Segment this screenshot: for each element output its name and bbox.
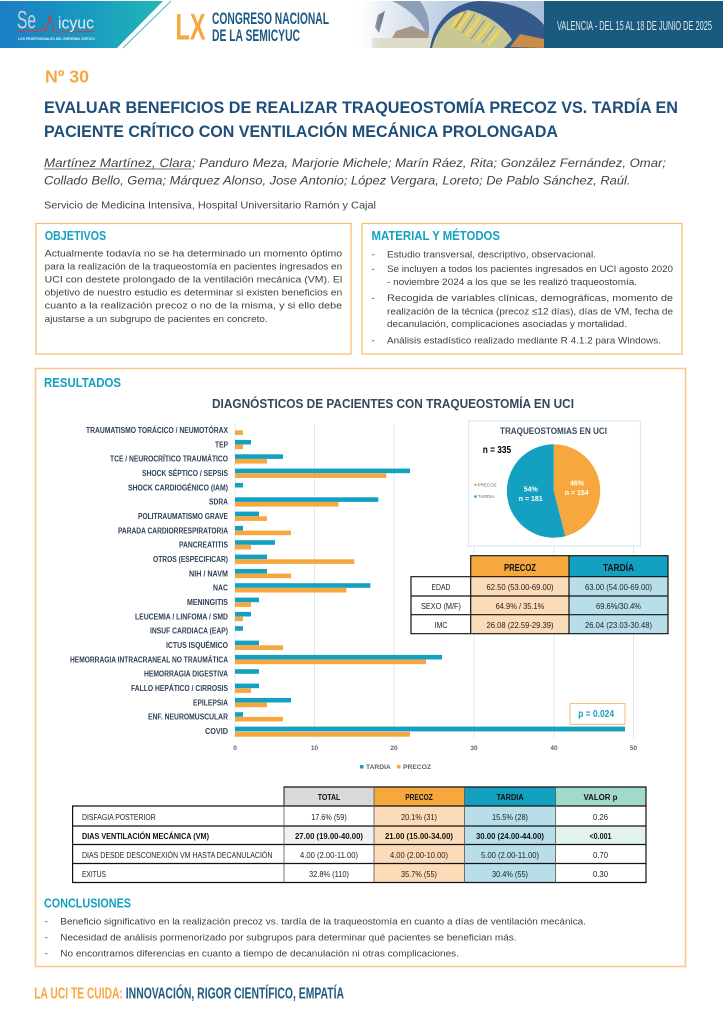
- table: resultados por grupo: DISFAGIA POSTERIOR: [82, 813, 156, 822]
- precoz bars: [235, 430, 426, 737]
- tardía bars: [235, 440, 625, 731]
- heading: objetivos: OBJETIVOS: [45, 229, 106, 243]
- list: material y métodos: - noviembre 2024 a los que se les realizó traqueostomía.: [387, 277, 637, 288]
- list: material y métodos: -: [372, 293, 375, 304]
- table: resultados por grupo: 35.7% (55): [401, 870, 437, 879]
- callout: p value: p = 0.024: [578, 709, 614, 720]
- congress title: DE LA SEMICYUC: [212, 27, 300, 45]
- chart title: DIAGNÓSTICOS DE PACIENTES CON TRAQUEOSTOMÍA EN UCI: [212, 396, 574, 411]
- panel: resultados: [36, 368, 686, 966]
- pie chart: traqueostomías en UCI: n = 154: [565, 490, 589, 497]
- pie chart: traqueostomías en UCI: [468, 421, 640, 546]
- heading: material y métodos: MATERIAL Y MÉTODOS: [372, 228, 500, 243]
- text: objetivos: [45, 248, 342, 325]
- table: resultados por grupo: 0.26: [593, 813, 609, 822]
- x axis labels: [233, 745, 637, 752]
- panel: objetivos: [36, 224, 351, 354]
- category labels: HEMORRAGIA DIGESTIVA: [144, 670, 228, 679]
- table: resultados por grupo: 17.6% (59): [311, 813, 347, 822]
- category labels: TEP: [215, 440, 229, 449]
- footer slogan: [34, 985, 344, 1003]
- table: características basales: 63.00 (54.00-69.00): [585, 583, 652, 592]
- category labels: NAC: [213, 584, 228, 593]
- bar chart: diagnósticos: [70, 424, 637, 771]
- category labels: PARADA CARDIORRESPIRATORIA: [118, 526, 228, 535]
- table: resultados por grupo: 0.70: [593, 851, 609, 860]
- category labels: COVID: [205, 727, 228, 736]
- table: características basales: [411, 556, 668, 634]
- footer slogan: LA UCI TE CUIDA:: [34, 986, 123, 1003]
- category labels: FALLO HEPÁTICO / CIRROSIS: [131, 684, 229, 693]
- congress title: LX: [176, 6, 206, 48]
- table: resultados por grupo: PRECOZ: [405, 793, 433, 802]
- table: características basales: 69.6%/30.4%: [596, 602, 641, 611]
- category labels: OTROS (ESPECIFICAR): [153, 555, 228, 564]
- pie legend: PRECOZ: [478, 482, 497, 487]
- table: resultados por grupo: 4.00 (2.00-10.00): [390, 851, 448, 860]
- pie chart: traqueostomías en UCI: n = 335: [483, 445, 512, 456]
- x axis labels: 30: [470, 745, 478, 752]
- callout: p value: [570, 704, 625, 724]
- table: resultados por grupo: 30.00 (24.00-44.00): [476, 832, 544, 841]
- title: EVALUAR BENEFICIOS DE REALIZAR TRAQUEOSTOMÍA PRECOZ VS. TARDÍA EN: [44, 98, 678, 117]
- category labels: SHOCK SÉPTICO / SEPSIS: [142, 469, 229, 478]
- pie chart: traqueostomías en UCI: 46%: [570, 480, 585, 488]
- list: conclusiones: -: [45, 917, 48, 928]
- table: características basales: 26.08 (22.59-29.39): [486, 621, 554, 630]
- x axis labels: 20: [390, 745, 398, 752]
- pie chart: traqueostomías en UCI: n = 181: [519, 496, 543, 503]
- footer slogan: INNOVACIÓN, RIGOR CIENTÍFICO, EMPATÍA: [126, 985, 344, 1003]
- x axis labels: 40: [550, 745, 558, 752]
- heading: resultados: RESULTADOS: [44, 376, 121, 390]
- list: material y métodos: -: [372, 335, 375, 346]
- category labels: MENINGITIS: [187, 598, 229, 607]
- table: resultados por grupo: 32.8% (110): [309, 870, 349, 879]
- category labels: SDRA: [209, 498, 228, 507]
- text: objetivos: Actualmente todavía no se ha determinado un momento óptimo: [45, 248, 342, 260]
- chart legend: TARDIA: [366, 764, 391, 771]
- date panel: [544, 1, 723, 48]
- text: objetivos: UCI con destete prolongado de la ventilación mecánica (VM). El: [45, 274, 342, 286]
- list: material y métodos: Análisis estadístico realizado mediante R 4.1.2 para Windows.: [387, 335, 661, 346]
- table: resultados por grupo: DIAS VENTILACIÓN MECÁNICA (VM): [82, 832, 209, 841]
- list: conclusiones: No encontramos diferencias en cuanto a tiempo de decanulación ni otras complicaciones.: [60, 949, 459, 960]
- pie slice: tardía: [507, 444, 565, 538]
- table: características basales: 62.50 (53.00-69.00): [486, 583, 554, 592]
- list: material y métodos: decanulación, complicaciones asociadas y mortalidad.: [387, 319, 627, 330]
- chart legend: PRECOZ: [403, 764, 431, 771]
- text: objetivos: objetivo de nuestro estudio es determinar si existen beneficios en: [45, 288, 342, 298]
- authors: ; Panduro Meza, Marjorie Michele; Marín Ráez, Rita; González Fernández, Omar;: [192, 156, 666, 170]
- category labels: NIH / NAVM: [189, 569, 228, 578]
- table: resultados por grupo: 30.4% (55): [492, 870, 528, 879]
- pie slice: precoz: [554, 444, 600, 536]
- x axis labels: 0: [233, 745, 237, 752]
- category labels: HEMORRAGIA INTRACRANEAL NO TRAUMÁTICA: [70, 655, 228, 664]
- list: material y métodos: Se incluyen a todos los pacientes ingresados en UCI agosto 2020: [387, 264, 673, 275]
- category labels: EPILEPSIA: [193, 698, 228, 707]
- table: características basales: TARDÍA: [603, 561, 634, 574]
- category labels: LEUCEMIA / LINFOMA / SMD: [135, 612, 228, 621]
- category labels: [70, 426, 229, 736]
- table: resultados por grupo: 4.00 (2.00-11.00): [300, 851, 358, 860]
- list: conclusiones: Beneficio significativo en la realización precoz vs. tardía de la traqueostomía en cuanto a días de ventilación mecánica.: [60, 917, 586, 928]
- abstract number: Nº 30: [45, 67, 89, 87]
- pie legend: [474, 482, 497, 499]
- pie chart: traqueostomías en UCI: 54%: [524, 486, 538, 494]
- text: objetivos: para la realización de la traqueostomía en pacientes ingresados en: [45, 262, 342, 272]
- table: resultados por grupo: VALOR p: [584, 793, 618, 802]
- table: resultados por grupo: <0.001: [590, 832, 612, 841]
- table: resultados por grupo: 15.5% (28): [492, 813, 528, 822]
- title: [44, 98, 678, 141]
- table: resultados por grupo: [73, 787, 646, 882]
- table: resultados por grupo: 27.00 (19.00-40.00): [295, 832, 363, 841]
- authors: Martínez Martínez, Clara: [44, 156, 192, 170]
- text: objetivos: cuanto a la realización precoz o no de la misma, y si ello debe: [45, 300, 342, 312]
- list: conclusiones: -: [45, 949, 48, 960]
- list: conclusiones: [45, 917, 586, 960]
- x axis labels: 50: [630, 745, 637, 752]
- category labels: PANCREATITIS: [179, 541, 229, 550]
- list: conclusiones: -: [45, 933, 48, 944]
- category labels: TCE / NEUROCRÍTICO TRAUMÁTICO: [110, 455, 228, 464]
- authors: [44, 156, 666, 188]
- category labels: ICTUS ISQUÉMICO: [166, 641, 228, 650]
- logo panel: Se: [17, 6, 36, 34]
- table: características basales: 64.9% / 35.1%: [496, 602, 544, 611]
- panel: material y métodos: [362, 224, 682, 354]
- category labels: ENF. NEUROMUSCULAR: [148, 713, 228, 722]
- pie chart: traqueostomías en UCI: TRAQUEOSTOMIAS EN UCI: [500, 426, 607, 436]
- chart legend: [360, 764, 431, 771]
- table: características basales: IMC: [434, 621, 448, 630]
- header photo: Valencia architecture: [352, 1, 544, 48]
- logo panel: LOS PROFESIONALES DEL ENFERMO CRÍTICO: [18, 36, 95, 41]
- category labels: TRAUMATISMO TORÁCICO / NEUMOTÓRAX: [86, 426, 229, 435]
- list: material y métodos: [372, 249, 673, 346]
- table: resultados por grupo: 5.00 (2.00-11.00): [481, 851, 539, 860]
- pie legend: TARDIA: [478, 494, 495, 499]
- title: PACIENTE CRÍTICO CON VENTILACIÓN MECÁNICA PROLONGADA: [44, 122, 558, 141]
- table: resultados por grupo: 20.1% (31): [401, 813, 437, 822]
- congress title: [176, 6, 329, 48]
- logo panel: [0, 1, 171, 48]
- table: resultados por grupo: DIAS DESDE DESCONEXIÓN VM HASTA DECANULACIÓN: [82, 851, 273, 860]
- table: características basales: 26.04 (23.03-30.48): [585, 621, 652, 630]
- list: material y métodos: Recogida de variables clínicas, demográficas, momento de: [387, 293, 673, 304]
- table: resultados por grupo: 0.30: [593, 870, 609, 879]
- text: objetivos: ajustarse a un subgrupo de pacientes en concreto.: [45, 314, 268, 325]
- category labels: POLITRAUMATISMO GRAVE: [138, 512, 229, 521]
- table: características basales: EDAD: [432, 583, 451, 592]
- list: material y métodos: -: [372, 264, 375, 275]
- category labels: SHOCK CARDIOGÉNICO (IAM): [128, 483, 228, 492]
- heading: conclusiones: CONCLUSIONES: [44, 897, 131, 911]
- table: resultados por grupo: 21.00 (15.00-34.00): [385, 832, 453, 841]
- list: conclusiones: Necesidad de análisis pormenorizado por subgrupos para determinar qué pacientes se benefician más.: [60, 933, 517, 944]
- category labels: INSUF CARDIACA (EAP): [150, 627, 228, 636]
- authors: Collado Bello, Gema; Márquez Alonso, Jose Antonio; López Vergara, Loreto; De Pablo Sánchez, Raúl.: [44, 174, 630, 188]
- table: características basales: PRECOZ: [504, 563, 536, 574]
- table: características basales: SEXO (M/F): [421, 602, 461, 611]
- logo panel: icyuc: [58, 14, 94, 32]
- affiliation: Servicio de Medicina Intensiva, Hospital Universitario Ramón y Cajal: [44, 201, 376, 212]
- list: material y métodos: realización de la técnica (precoz ≤12 días), días de VM, fecha de: [387, 306, 673, 317]
- table: resultados por grupo: TARDIA: [496, 793, 524, 802]
- table: resultados por grupo: TOTAL: [318, 793, 340, 802]
- table: resultados por grupo: EXITUS: [82, 870, 106, 879]
- congress title: CONGRESO NACIONAL: [212, 10, 329, 28]
- list: material y métodos: Estudio transversal, descriptivo, observacional.: [387, 249, 596, 260]
- header banner: [0, 1, 723, 48]
- list: material y métodos: -: [372, 249, 375, 260]
- x axis labels: 10: [311, 745, 318, 752]
